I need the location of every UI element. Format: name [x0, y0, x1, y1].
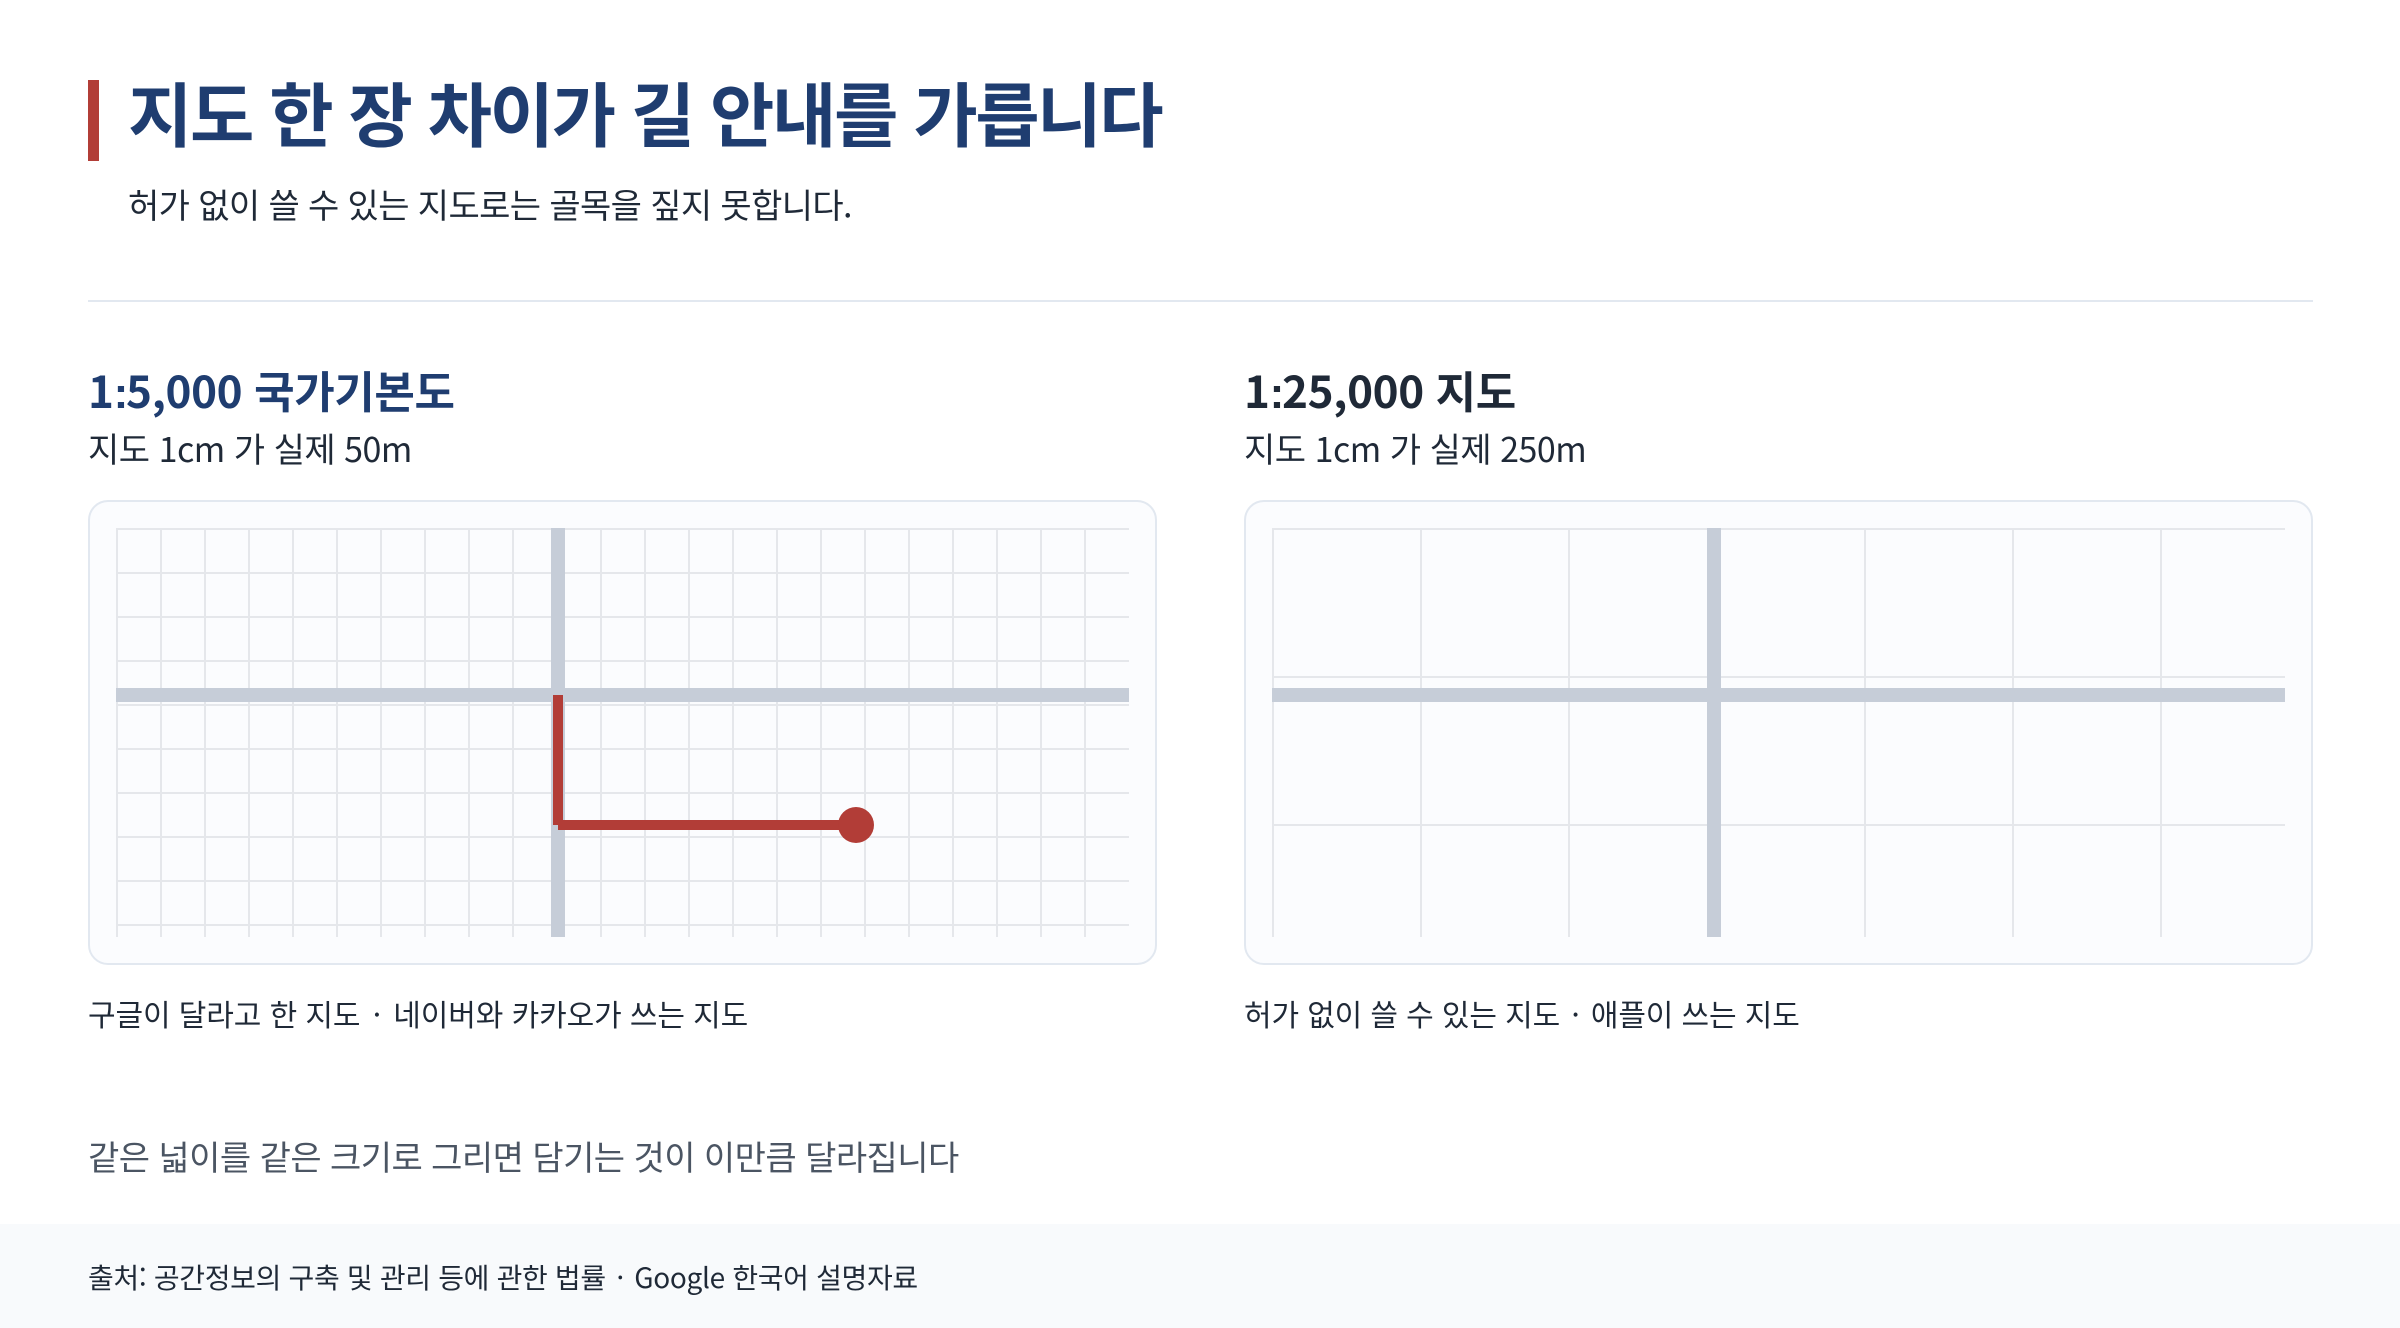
panel: 1:5,000 map [88, 357, 1157, 1035]
panel: 1:25,000 map [1244, 357, 2313, 1035]
source text: 출처: 공간정보의 구축 및 관리 등에 관한 법률 · Google 한국어 설명자료 [88, 1257, 918, 1297]
map card: dense grid with route [88, 500, 1157, 965]
map drawing: sparse grid and roads [1272, 528, 2285, 937]
roads [116, 528, 1129, 937]
subtitle: 허가 없이 쓸 수 있는 지도로는 골목을 짚지 못합니다. [128, 179, 852, 228]
title: 지도 한 장 차이가 길 안내를 가릅니다 [128, 61, 1161, 162]
panel heading: 1:25,000: 1:25,000 지도 [1244, 357, 1516, 421]
map drawing: dense grid, roads and route [116, 528, 1129, 937]
title accent bar [88, 80, 99, 161]
panel scale note: 1:5,000: 지도 1cm 가 실제 50m [88, 423, 412, 472]
roads [1272, 528, 2285, 937]
route with destination marker [553, 695, 874, 843]
panel caption: 1:25,000: 허가 없이 쓸 수 있는 지도 · 애플이 쓰는 지도 [1244, 991, 1800, 1035]
takeaway note: 같은 넓이를 같은 크기로 그리면 담기는 것이 이만큼 달라집니다 [88, 1131, 959, 1180]
panel heading: 1:5,000: 1:5,000 국가기본도 [88, 357, 455, 421]
header divider [88, 300, 2313, 302]
panel scale note: 1:25,000: 지도 1cm 가 실제 250m [1244, 423, 1586, 472]
map card: sparse grid [1244, 500, 2313, 965]
footer band with source [0, 1224, 2400, 1328]
panel caption: 1:5,000: 구글이 달라고 한 지도 · 네이버와 카카오가 쓰는 지도 [88, 991, 748, 1035]
